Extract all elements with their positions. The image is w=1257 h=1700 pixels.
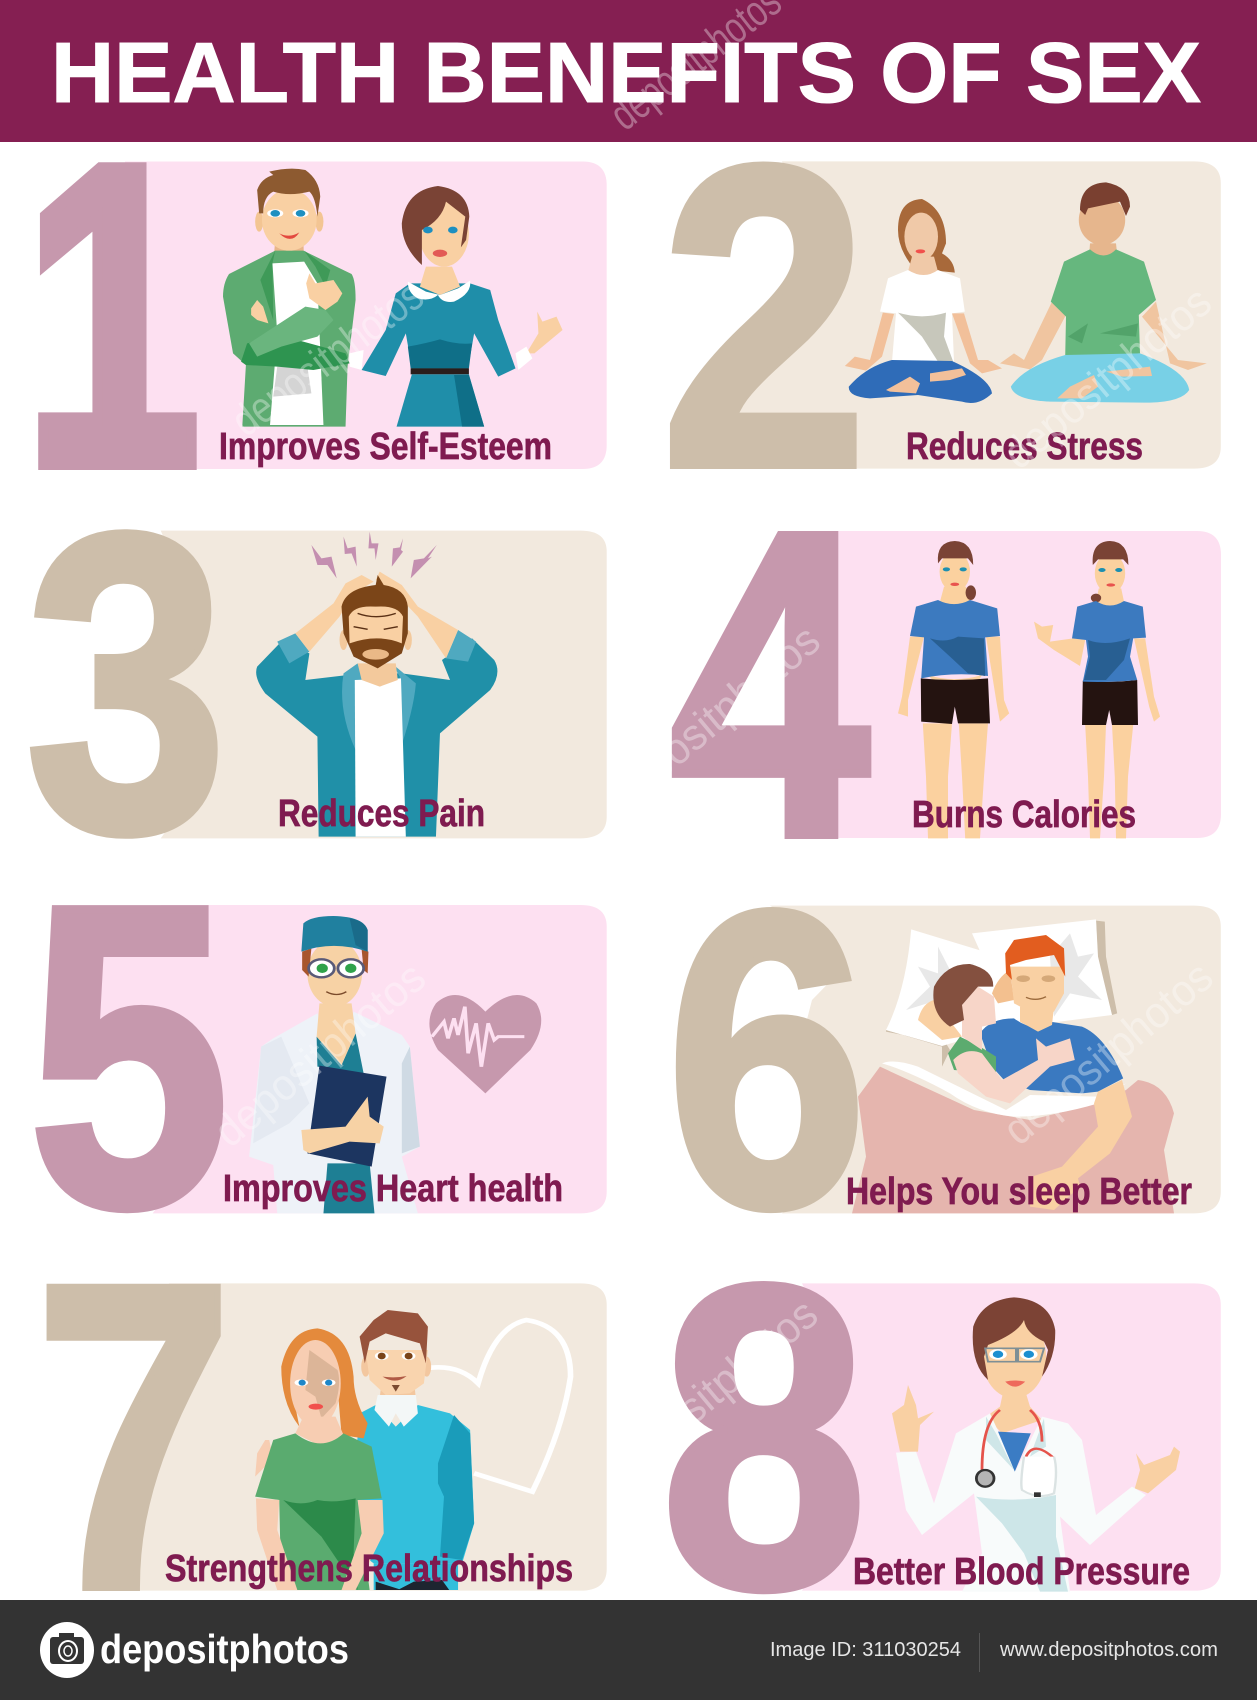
watermark: depositphotos: [223, 271, 433, 446]
illustration: couple with heart: [255, 1310, 571, 1590]
watermark: depositphotos: [994, 277, 1221, 479]
number 5: 5: [28, 817, 230, 1297]
label: Reduces Pain: [278, 793, 485, 835]
label: Better Blood Pressure: [853, 1551, 1190, 1593]
number 7: 7: [34, 1195, 233, 1680]
website: www.depositphotos.com: [999, 1639, 1218, 1661]
panel background: [119, 1283, 607, 1591]
number 4: 4: [670, 440, 872, 928]
panel: better blood pressure: [661, 1197, 1221, 1678]
illustration: doctor: [249, 916, 541, 1213]
watermark: depositphotos: [994, 952, 1222, 1155]
header banner: [0, 0, 1257, 142]
title: HEALTH BENEFITS OF SEX: [51, 26, 1201, 121]
watermark: depositphotos: [598, 1289, 827, 1493]
icon: camera logo: [40, 1622, 94, 1678]
panel: improves heart health: [28, 817, 607, 1297]
panel: improves self-esteem: [23, 76, 607, 554]
label: Strengthens Relationships: [165, 1548, 573, 1590]
number 2: 2: [660, 78, 868, 557]
illustration: man and woman: [223, 169, 563, 427]
panel background: [810, 531, 1221, 838]
watermark: [205, 0, 1222, 1493]
illustration: female doctor: [892, 1297, 1180, 1592]
panel background: [76, 905, 607, 1213]
panel background: [770, 906, 1221, 1213]
panel: helps you sleep better: [666, 825, 1221, 1295]
illustration: two women before and after: [898, 541, 1160, 838]
illustration: couple sleeping: [852, 919, 1174, 1213]
image id: Image ID: 311030254: [770, 1639, 961, 1661]
panel: strengthens relationships: [34, 1195, 607, 1680]
illustration: man with headache: [256, 532, 497, 837]
label: Improves Self-Esteem: [219, 426, 552, 468]
label: Improves Heart health: [223, 1168, 563, 1210]
panel: burns calories: [670, 440, 1221, 928]
label: Burns Calories: [912, 794, 1136, 836]
panel: reduces pain: [25, 445, 607, 920]
watermark: depositphotos: [598, 615, 829, 821]
logo wordmark: depositphotos: [100, 1626, 349, 1672]
number 3: 3: [25, 445, 227, 920]
number 1: 1: [23, 76, 200, 554]
panel background: [161, 531, 607, 838]
illustration: two people meditating: [845, 182, 1207, 403]
panel background: [722, 161, 1221, 469]
panel background: [125, 162, 607, 469]
panel background: [802, 1283, 1221, 1591]
number 8: 8: [661, 1197, 867, 1678]
footer bar: [0, 1600, 1257, 1700]
panel: reduces stress: [660, 78, 1221, 557]
number 6: 6: [666, 825, 867, 1295]
watermark: depositphotos: [205, 953, 435, 1157]
label: Helps You sleep Better: [846, 1171, 1192, 1213]
label: Reduces Stress: [906, 426, 1143, 468]
